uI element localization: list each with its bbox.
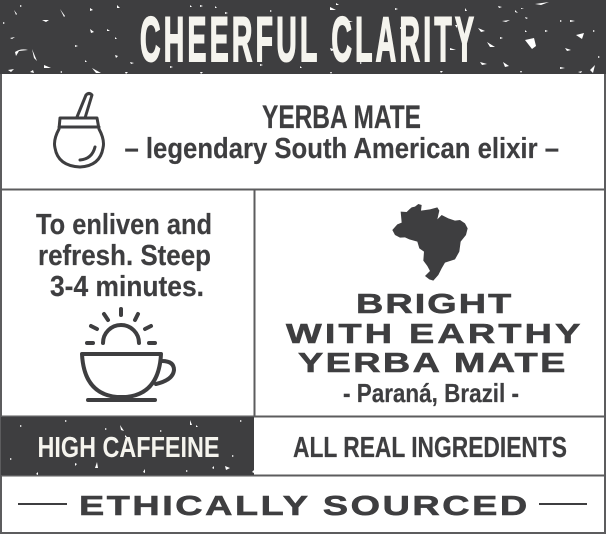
badge: high caffeine: HIGH CAFFEINE [38, 432, 220, 464]
heading: flavor description: YERBA MATE [298, 348, 565, 379]
banner: ethically sourced: ETHICALLY SOURCED [79, 491, 527, 522]
heading: flavor description [286, 289, 580, 379]
icon: map of Brazil [392, 204, 468, 281]
text: origin: - Paraná, Brazil - [343, 378, 519, 408]
text: steeping instructions: To enliven and [36, 209, 212, 241]
heading: flavor description: BRIGHT [356, 289, 511, 320]
heading: yerba mate: YERBA MATE [262, 99, 421, 135]
text: steeping instructions: 3-4 minutes. [50, 271, 204, 303]
panel: header banner [0, 0, 606, 75]
icon: mate gourd [54, 94, 104, 167]
title: CHEERFUL CLARITY [140, 6, 474, 75]
badge: high caffeine [1, 417, 254, 475]
icon: cup with rising sun [82, 309, 174, 400]
text: steeping instructions [36, 209, 212, 303]
text: legendary elixir: – legendary South American elixir – [124, 133, 559, 165]
text: steeping instructions: refresh. Steep [38, 240, 211, 272]
heading: flavor description: WITH EARTHY [286, 319, 580, 350]
